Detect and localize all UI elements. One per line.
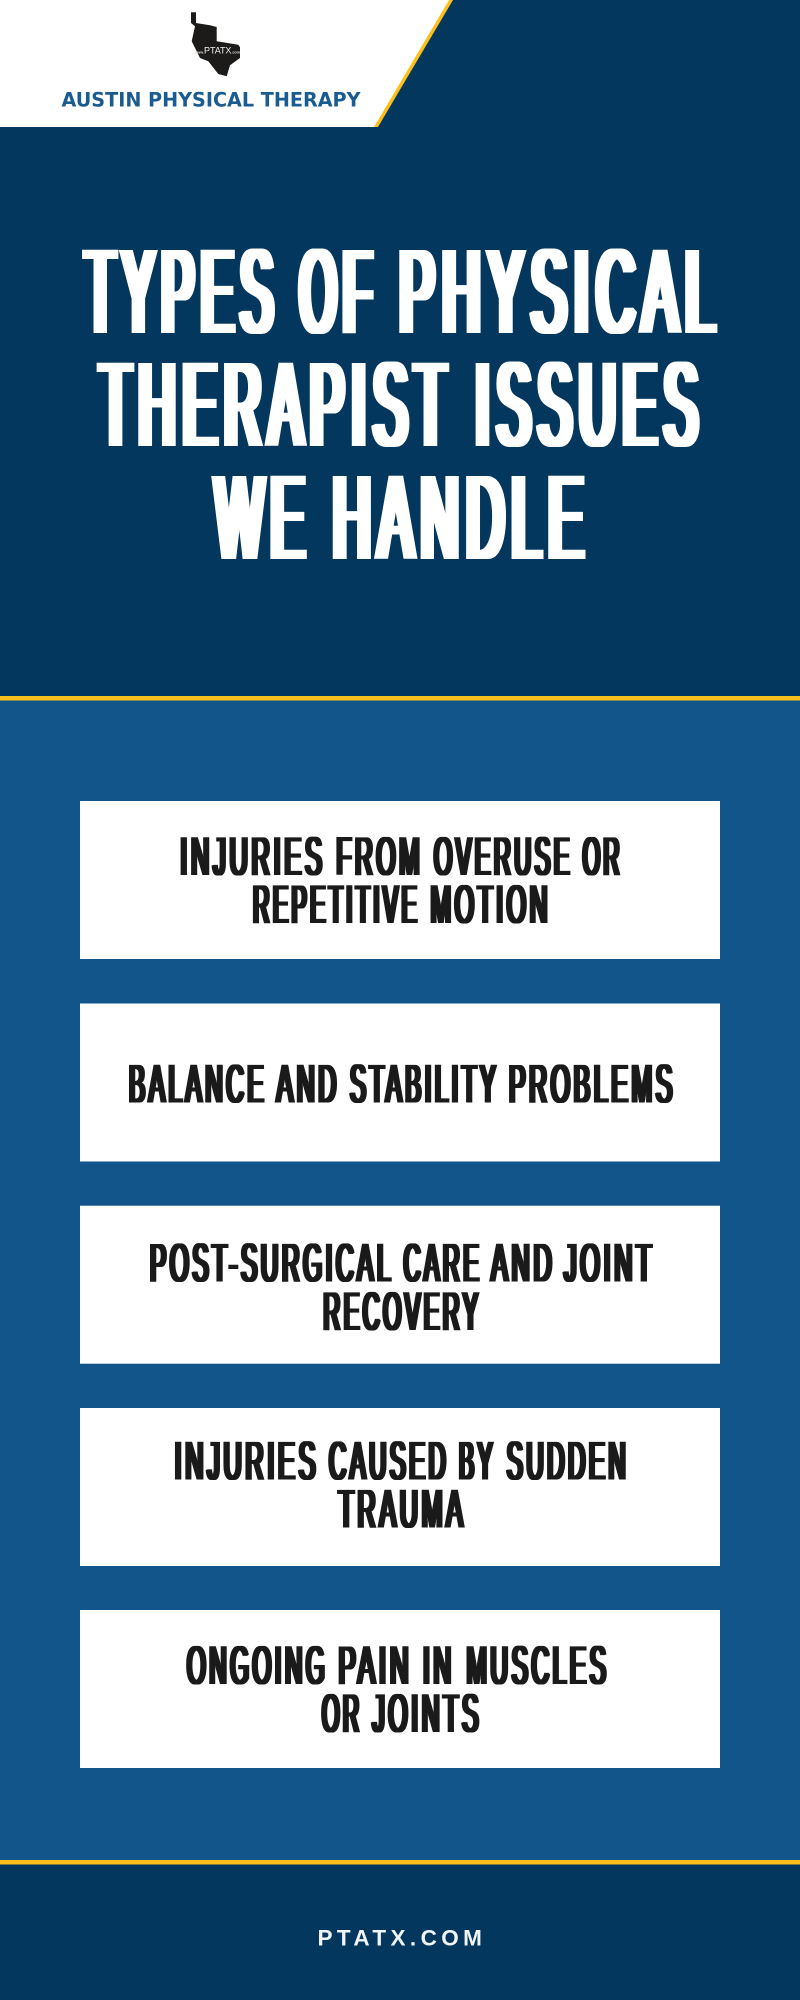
card 1: overuse injuries: FROM [336,825,423,887]
card 5: ongoing pain: JOINTS [372,1682,482,1744]
card 5: ongoing pain: IN [423,1634,455,1696]
card 1: overuse injuries: REPETITIVE [253,873,420,935]
card 3: post-surgical care: POST-SURGICAL [150,1232,394,1294]
card 2: balance problems: BALANCE [129,1053,267,1115]
card 4: sudden trauma: BY [459,1429,496,1491]
card 4: sudden trauma: SUDDEN [507,1429,629,1491]
divider: gold line under header [0,696,800,700]
divider: gold line above footer [0,1860,800,1864]
card 3: post-surgical care: CARE [404,1232,482,1294]
card 5: ongoing pain [80,1610,720,1768]
title [86,224,722,585]
title: OF [300,224,378,359]
title: TYPES [86,224,280,359]
card 3: post-surgical care: RECOVERY [323,1280,482,1342]
card 1: overuse injuries: MOTION [430,873,551,935]
logo wordmark: AUSTIN PHYSICAL THERAPY [62,88,362,112]
card 1: overuse injuries: OVERUSE [434,825,573,887]
card 2: balance problems [80,1004,720,1162]
card 3: post-surgical care: JOINT [564,1232,655,1294]
footer website text: PTATX.COM [318,1926,486,1950]
icon: Texas map logo: www.PTATX.com [194,46,241,56]
card 3: post-surgical care [80,1206,720,1364]
card 3: post-surgical care: AND [491,1232,555,1294]
card 4: sudden trauma: CAUSED [329,1429,449,1491]
icon: Texas map logo [191,12,241,76]
card 4: sudden trauma: INJURIES [175,1429,319,1491]
logo panel [0,0,453,127]
card 1: overuse injuries [80,801,720,959]
card 4: sudden trauma [80,1408,720,1566]
panel: dark footer background [0,1862,800,2000]
panel: mid blue list background [0,697,800,1862]
card 2: balance problems: STABILITY [350,1053,499,1115]
card 5: ongoing pain: PAIN [338,1634,412,1696]
card 2: balance problems: AND [276,1053,340,1115]
title: WE [216,450,312,585]
card 5: ongoing pain: MUSCLES [466,1634,610,1696]
card 1: overuse injuries: INJURIES [180,825,326,887]
card 1: overuse injuries: OR [583,825,623,887]
panel: dark header background [0,0,800,697]
card 4: sudden trauma: TRAUMA [338,1478,467,1540]
card 5: ongoing pain: ONGOING [187,1634,328,1696]
card 5: ongoing pain: OR [322,1682,362,1744]
